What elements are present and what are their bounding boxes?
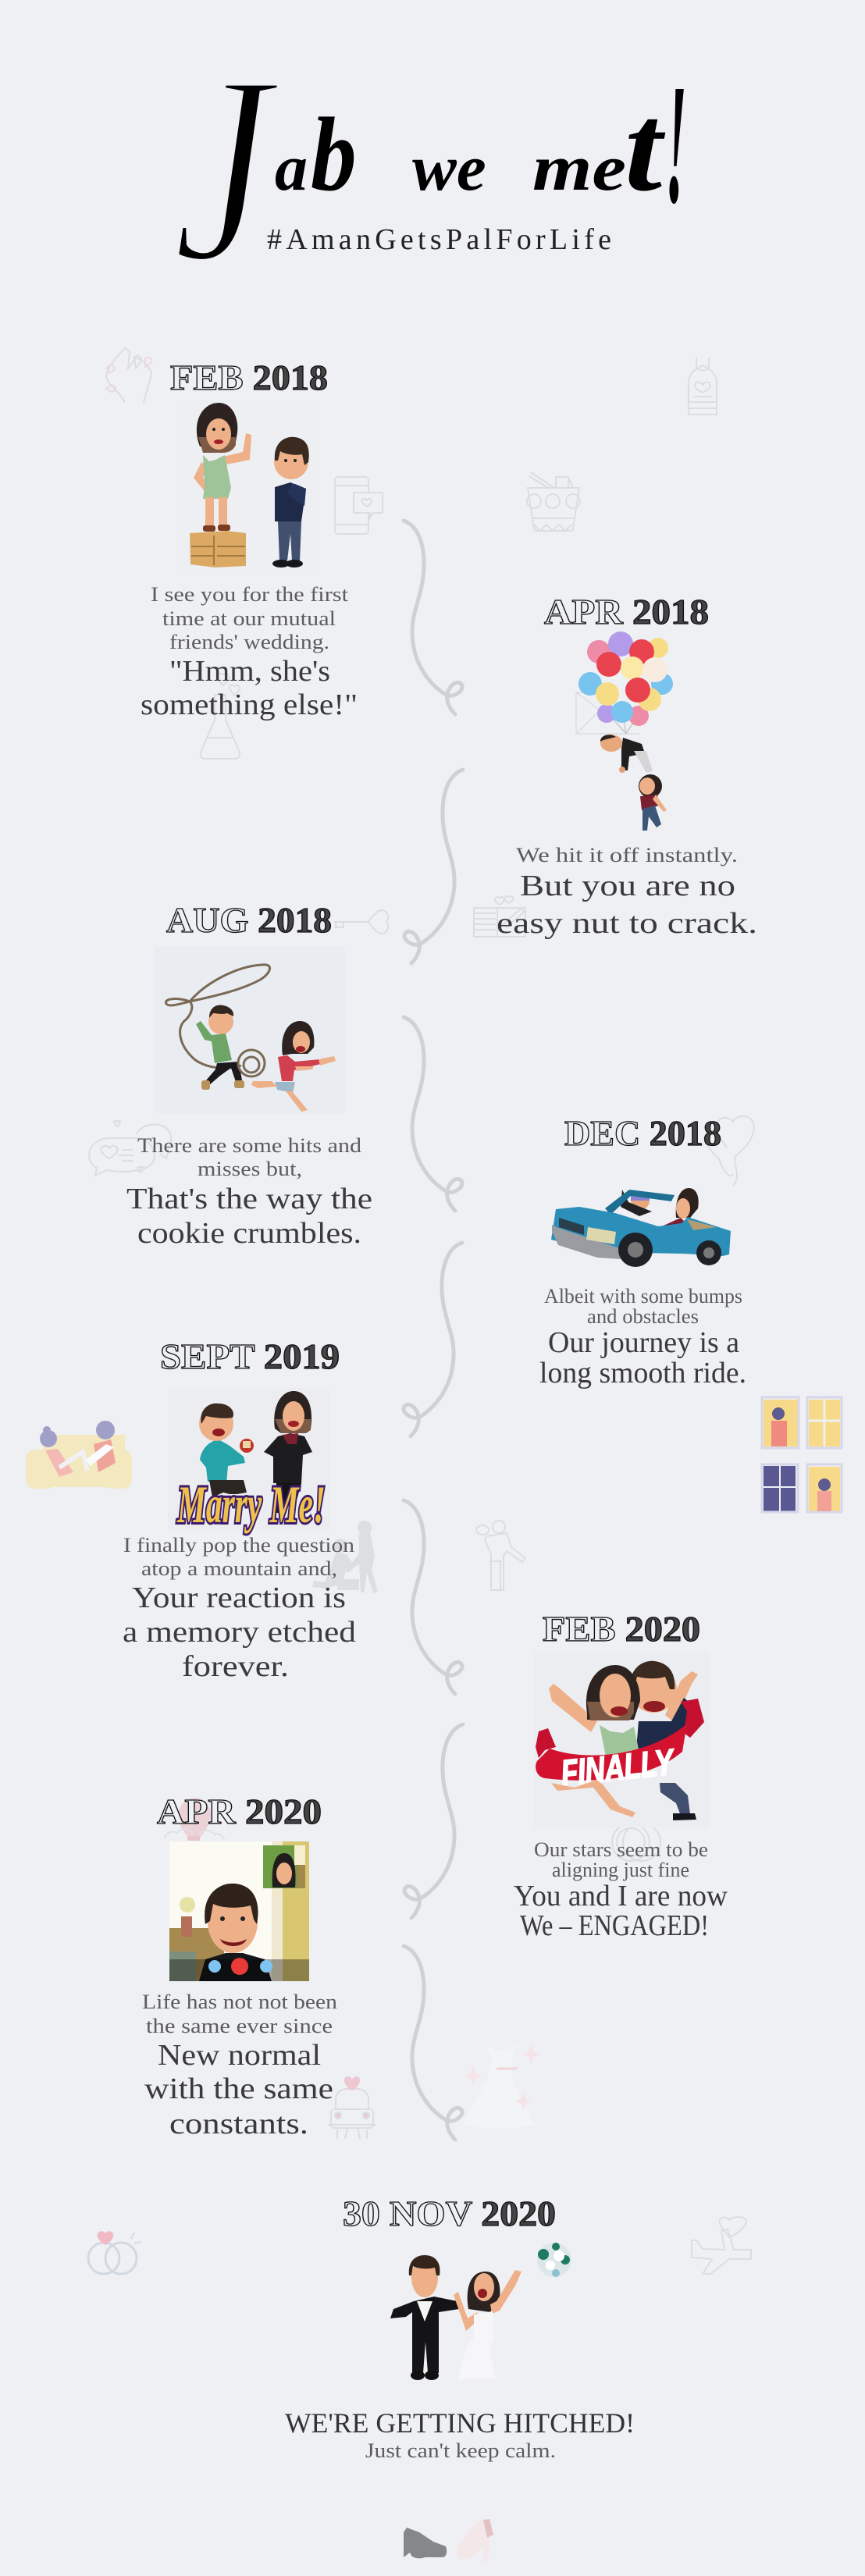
highlight line 1: That's the way the [126, 1183, 372, 1215]
description line 2: and obstacles [587, 1305, 699, 1328]
icon: heart key [334, 910, 388, 934]
highlight line 1: Our journey is a [548, 1326, 739, 1359]
icon: heart balloons [705, 1116, 754, 1186]
illustration: groom and bride shoes [404, 2519, 493, 2562]
icon: finger heart [106, 348, 151, 403]
icon: wedding car [328, 2076, 376, 2139]
illustration: couple in blue convertible [551, 1188, 731, 1267]
description line 2: aligning just fine [552, 1859, 689, 1881]
timeline connector 7 [404, 1946, 462, 2140]
illustration: marry me proposal: Marry Me! [176, 1475, 326, 1534]
highlight line 1: But you are no [520, 870, 735, 902]
description: There are some hits and [137, 1134, 361, 1157]
description: Life has not not been [142, 1991, 337, 2013]
description line 2: time at our mutual [162, 607, 336, 630]
description: I finally pop the question [123, 1534, 354, 1557]
text: ! [665, 48, 687, 239]
description: Albeit with some bumps [544, 1285, 742, 1308]
highlight line 2: easy nut to crack. [497, 907, 757, 940]
panel: Apr 2018 [497, 592, 757, 940]
panel: Feb 2018 [141, 358, 358, 721]
illustration: video call [169, 1841, 309, 1981]
heading: 30 Nov 2020: 30 NOV 2020 [343, 2194, 556, 2233]
illustration: couple on sofa [26, 1421, 132, 1489]
closing sub line: Just can't keep calm. [365, 2439, 556, 2462]
description line 3: friends' wedding. [169, 631, 329, 653]
illustration: woman on crate and man thinking [180, 399, 320, 576]
illustration: couple floating with balloons [576, 632, 673, 831]
description line 2: the same ever since [146, 2015, 333, 2037]
highlight line 2: We – ENGAGED! [520, 1909, 709, 1942]
panel: Dec 2018 [539, 1113, 746, 1389]
highlight line 3: forever. [182, 1650, 289, 1683]
icon: interlocked rings [612, 1823, 660, 1861]
description line 2: misses but, [198, 1158, 302, 1180]
timeline connector 1 [404, 521, 462, 714]
heading: Apr 2020: APR 2020 [157, 1791, 322, 1831]
heading: Aug 2018: AUG 2018 [166, 900, 332, 940]
illustration: marry me proposal [168, 1388, 330, 1534]
highlight line 3: constants. [169, 2108, 308, 2140]
icon: hot air balloon [165, 1798, 224, 1841]
icon: plane with heart [692, 2217, 751, 2274]
title: a [275, 132, 308, 205]
heading: Feb 2020: FEB 2020 [543, 1609, 700, 1649]
timeline connector 4 [404, 1243, 462, 1436]
highlight line 1: New normal [158, 2039, 321, 2072]
highlight line 1: "Hmm, she's [169, 655, 330, 688]
highlight line 1: You and I are now [514, 1880, 728, 1912]
icon: gift tag [689, 358, 717, 415]
heading: Sept 2019: SEPT 2019 [160, 1336, 340, 1376]
description line 2: atop a mountain and, [141, 1557, 337, 1580]
description: Our stars seem to be [534, 1838, 708, 1861]
illustration: finally ribbon couple: FINALLY [559, 1741, 678, 1793]
closing headline: WE'RE GETTING HITCHED! [285, 2407, 635, 2439]
panel: Aug 2018 [126, 900, 372, 1250]
heading: Apr 2018: APR 2018 [544, 592, 709, 632]
icon: wedding dress [464, 2044, 540, 2128]
title: t [625, 78, 666, 217]
illustration: finally ribbon couple [533, 1653, 709, 1827]
title: me [532, 132, 626, 205]
heading: Dec 2018: DEC 2018 [564, 1113, 721, 1153]
illustration: bride and groom with bouquet [390, 2243, 571, 2380]
illustration: lasso chase [155, 947, 345, 1113]
highlight line 1: Your reaction is [132, 1582, 346, 1614]
panel: Feb 2020 [514, 1609, 728, 1942]
highlight line 2: something else!" [141, 688, 358, 721]
timeline connector 5 [404, 1500, 462, 1694]
illustration: proposal silhouette [312, 1521, 378, 1593]
subtitle hashtag: #AmanGetsPalForLife [267, 223, 611, 256]
highlight line 2: with the same [144, 2073, 333, 2105]
panel: Sept 2019 [123, 1336, 356, 1683]
icon: flask [201, 674, 240, 759]
description: I see you for the first [151, 583, 349, 606]
title: b [311, 97, 379, 213]
title: we [412, 132, 503, 205]
heading: Feb 2018: FEB 2018 [170, 358, 328, 397]
highlight line 2: cookie crumbles. [137, 1217, 361, 1250]
highlight line 2: long smooth ride. [539, 1357, 746, 1389]
timeline connector 6 [404, 1724, 463, 1918]
icon: basket [527, 472, 580, 531]
icon: notebook [474, 896, 525, 937]
icon: groom carrying bride [476, 1521, 525, 1590]
panel: Apr 2020 [142, 1791, 337, 2140]
icon: rings with heart [88, 2231, 141, 2274]
timeline connector 3 [404, 1017, 462, 1211]
title: J [173, 20, 279, 318]
illustration: couple at windows [762, 1397, 842, 1512]
timeline connector 2 [404, 770, 463, 963]
description: We hit it off instantly. [516, 844, 738, 866]
icon: chat bubbles [89, 1121, 171, 1176]
highlight line 2: a memory etched [123, 1616, 356, 1649]
icon: phone with hearts [335, 477, 383, 534]
panel: 30 Nov 2020 [285, 2194, 635, 2462]
